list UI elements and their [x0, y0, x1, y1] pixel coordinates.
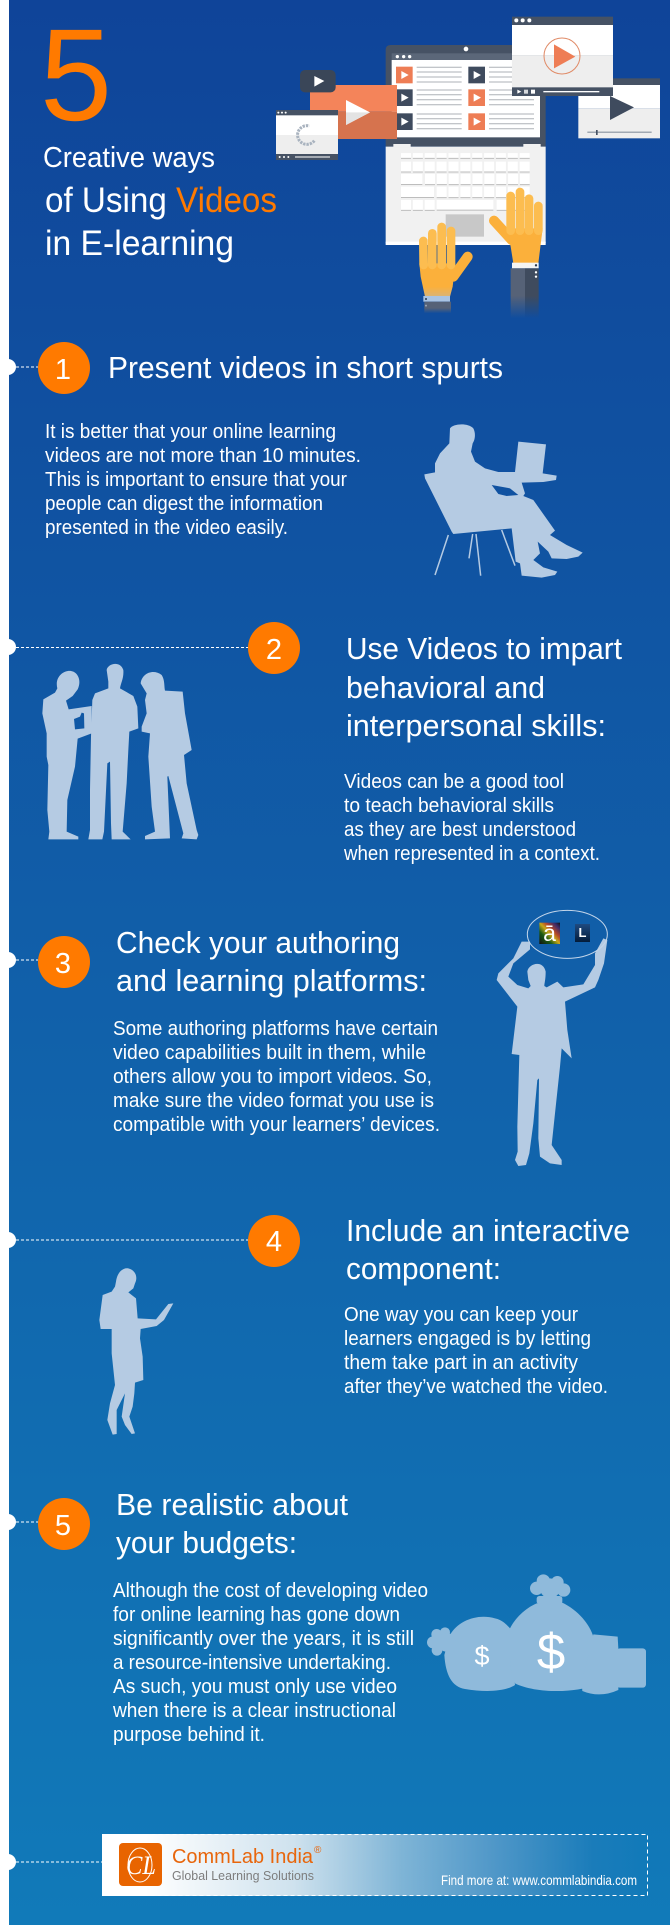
heading: step 2: behavioral and [346, 670, 545, 705]
badge: step 2 [248, 622, 300, 674]
heading: step 3: Check your authoring [116, 925, 400, 960]
brand name: Global Learning Solutions [172, 1868, 314, 1883]
body text: step 5: Although the cost of developing video [113, 1580, 428, 1602]
window: large play video [512, 17, 613, 96]
body text: step 1: videos are not more than 10 minutes. [45, 445, 361, 467]
connector: step 2 [0, 639, 248, 655]
body text: step 5: purpose behind it. [113, 1724, 265, 1746]
connector: step 1 [0, 359, 38, 375]
laptop base and keyboard [386, 144, 546, 245]
icon: three standing people [42, 664, 198, 839]
body text: step 4: them take part in an activity [344, 1352, 578, 1374]
badge: step 4 [248, 1215, 300, 1267]
badge: step 1 [38, 342, 90, 394]
body text: step 1: presented in the video easily. [45, 517, 288, 539]
title: in E-learning [45, 224, 234, 263]
body text: step 5: As such, you must only use video [113, 1676, 397, 1698]
body text: step 2: Videos can be a good tool [344, 771, 564, 793]
body text: step 5: when there is a clear instructional [112, 1700, 396, 1722]
body text: step 5: for online learning has gone down [113, 1604, 400, 1626]
body text: step 4 [344, 1304, 608, 1398]
body text: step 5: significantly over the years, it is still [113, 1628, 414, 1650]
icon: money bags and coins [427, 1574, 646, 1694]
logo letters on icons: ā [543, 920, 556, 946]
body text: step 1: It is better that your online learning [45, 421, 336, 443]
badge: step 5: 5 [55, 1510, 71, 1542]
orange video [310, 85, 397, 139]
footer banner [102, 1834, 648, 1896]
body text: step 2 [343, 771, 600, 865]
logo letters on icons: L [579, 925, 587, 940]
badge: step 5 [38, 1498, 90, 1550]
icon: CommLab logo: CL [126, 1851, 156, 1880]
heading: step 2: interpersonal skills: [346, 708, 606, 743]
body text: step 2: as they are best understood [344, 819, 576, 841]
connector: step 3 [0, 952, 38, 968]
heading: step 4: Include an interactive [346, 1213, 630, 1248]
brand name [172, 1845, 322, 1883]
heading: step 3: and learning platforms: [116, 963, 427, 998]
window: loading spinner [276, 110, 338, 160]
connector: footer [0, 1854, 102, 1870]
body text: step 3: others allow you to import videos. So, [113, 1066, 432, 1088]
heading: step 5: Be realistic about [116, 1487, 348, 1522]
brand name: ® [314, 1845, 322, 1856]
heading: step 2: Use Videos to impart [346, 631, 622, 666]
window: dark play video [578, 78, 660, 138]
body text: step 4: learners engaged is by letting [344, 1328, 591, 1350]
badge: step 1: 1 [55, 354, 71, 386]
icon: woman with tablet [99, 1268, 173, 1435]
connector: step 5 [0, 1514, 38, 1530]
icon: seated man with laptop [424, 424, 583, 578]
title: of Using Videos [45, 181, 277, 220]
connector: step 4 [0, 1232, 248, 1248]
title [40, 1, 277, 263]
body text: step 3: video capabilities built in them, while [113, 1042, 426, 1064]
body text: step 1 [45, 421, 361, 539]
heading: step 5: your budgets: [116, 1525, 297, 1560]
badge: step 2: 2 [266, 634, 282, 666]
title: Creative ways [43, 142, 215, 174]
right hand [494, 192, 543, 318]
logo letters on icons [543, 920, 587, 946]
body text: step 3: make sure the video format you use is [113, 1090, 434, 1112]
brand name: CommLab India [172, 1846, 314, 1868]
icon: money bags and coins: $ [474, 1641, 490, 1671]
body text: step 5 [112, 1580, 428, 1746]
icon: money bags and coins: $ [537, 1623, 565, 1680]
body text: step 1: This is important to ensure that your [45, 469, 347, 491]
heading: step 4 [346, 1213, 630, 1286]
body text: step 3: Some authoring platforms have certain [113, 1018, 438, 1040]
heading: step 5 [116, 1487, 348, 1560]
body text: step 4: One way you can keep your [344, 1304, 578, 1326]
title: 5 [40, 1, 112, 148]
badge: step 3: 3 [55, 948, 71, 980]
dark small video [300, 70, 336, 92]
heading: step 4: component: [346, 1251, 501, 1286]
icon: CommLab logo [119, 1843, 162, 1886]
badge: step 4: 4 [266, 1226, 282, 1258]
heading: step 3 [116, 925, 427, 998]
heading: step 1: Present videos in short spurts [108, 350, 503, 385]
body text: step 3: compatible with your learners’ devices. [113, 1114, 440, 1136]
illustration: laptop with videos and hands [276, 17, 660, 318]
laptop screen [386, 45, 546, 147]
icon: man holding up software logos [497, 910, 607, 1166]
body text: step 5: a resource-intensive undertaking. [113, 1652, 391, 1674]
body text: step 2: to teach behavioral skills [344, 795, 554, 817]
heading: step 2 [346, 631, 622, 743]
body text: step 4: after they’ve watched the video. [344, 1376, 608, 1398]
left hand [419, 227, 468, 313]
body text: step 1: people can digest the information [45, 493, 323, 515]
body text: step 3 [113, 1018, 440, 1136]
body text: step 2: when represented in a context. [343, 843, 600, 865]
badge: step 3 [38, 936, 90, 988]
